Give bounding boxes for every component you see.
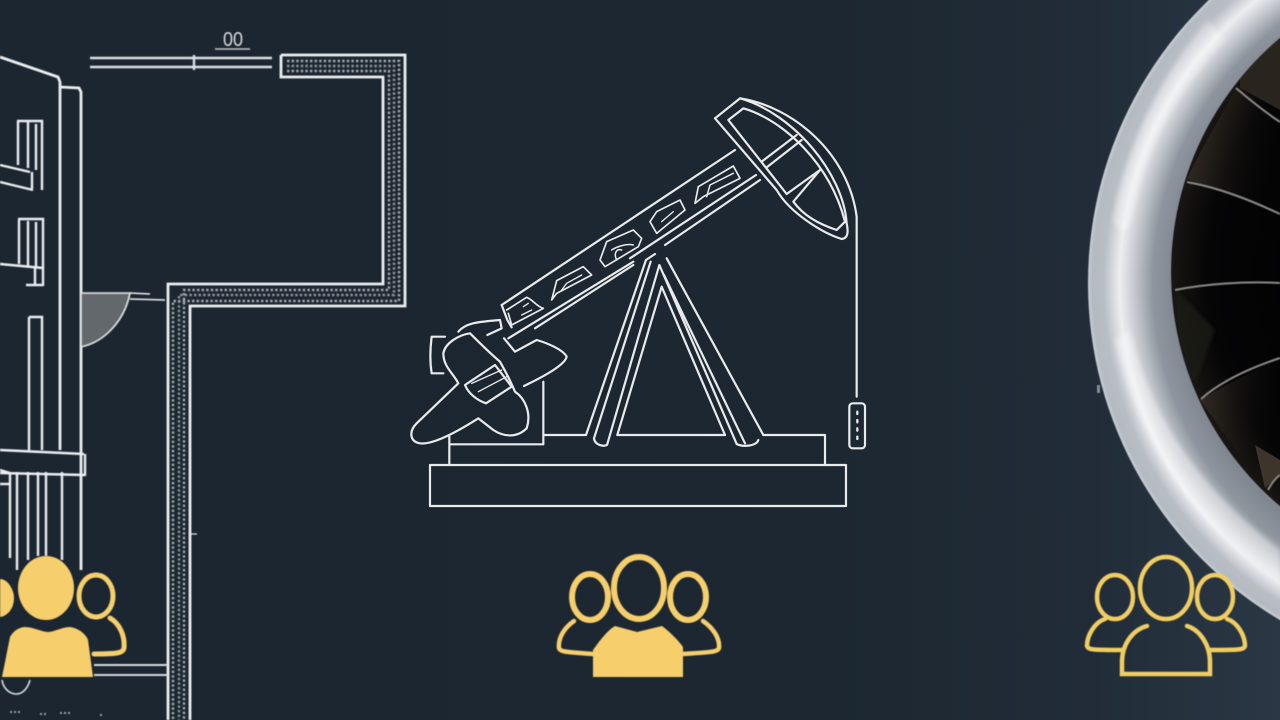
- pumpjack horsehead and polished rod: [715, 98, 865, 448]
- turbine nacelle ring: [1088, 0, 1280, 675]
- dimension line with label: [90, 29, 272, 70]
- dimension line with label: 00: [223, 29, 243, 51]
- pumpjack walking beam: [502, 150, 760, 338]
- icon: oil pumpjack: [411, 98, 865, 506]
- pumpjack crank and counterweight: [411, 320, 567, 443]
- turbine fan interior: [1171, 0, 1280, 578]
- lower-left plan lines: [2, 665, 168, 715]
- pumpjack base and platform: [430, 382, 846, 506]
- floor plan wall: [168, 55, 405, 720]
- building elevation: [0, 57, 165, 570]
- turbine engine: [1088, 0, 1280, 675]
- icon: people group, left (filled lead): [0, 556, 124, 677]
- pumpjack A-frame: [586, 254, 763, 446]
- icon: people group, right (outline): [1087, 557, 1245, 674]
- icon: people group, centre (filled body): [559, 557, 719, 677]
- door swing: [81, 293, 165, 347]
